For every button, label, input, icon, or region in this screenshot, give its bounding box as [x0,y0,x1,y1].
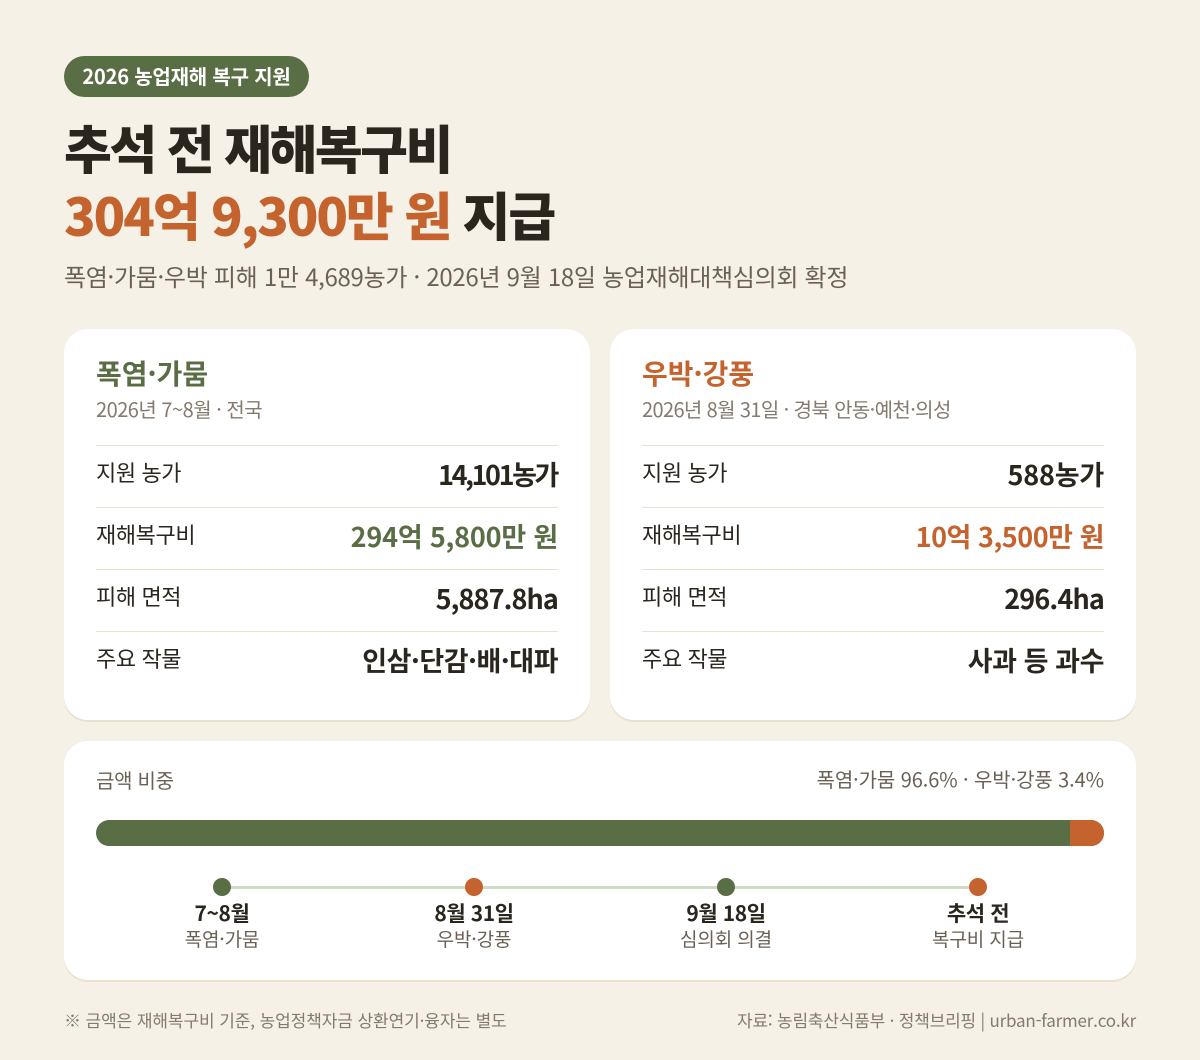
timeline line [222,886,978,889]
row value: 294억 5,800만 원 [351,516,558,555]
panel subheading: 2026년 7~8월 · 전국 [96,394,262,423]
panel: amount share and timeline [64,741,1136,980]
row value: 사과 등 과수 [968,640,1104,679]
title [64,109,554,251]
row value: 14,101농가 [438,454,557,493]
row label: 주요 작물 [642,642,727,674]
badge: 2026 농업재해 복구 지원 [82,61,291,90]
share values: 폭염·가뭄 96.6% · 우박·강풍 3.4% [817,764,1104,793]
row value: 588농가 [1008,454,1104,493]
row label: 피해 면적 [96,580,181,612]
timeline dot [969,878,987,896]
timeline item: 9월 18일 [686,898,766,928]
row label: 지원 농가 [642,456,727,488]
share label: 금액 비중 [96,765,174,794]
row value: 인삼·단감·배·대파 [362,640,558,679]
row label: 피해 면적 [642,580,727,612]
panel heading: 폭염·가뭄 [96,353,208,393]
row value: 5,887.8ha [436,578,558,617]
timeline item: 복구비 지급 [932,925,1024,952]
timeline item: 심의회 의결 [680,925,772,952]
timeline item [932,898,1024,952]
timeline dot [465,878,483,896]
timeline item: 7~8월 [195,898,249,928]
source: 자료: 농림축산식품부 · 정책브리핑 | urban-farmer.co.kr [737,1007,1136,1032]
timeline item: 우박·강풍 [437,925,511,952]
row value: 10억 3,500만 원 [916,516,1104,555]
timeline dot [213,878,231,896]
panel: heat and drought [64,329,590,720]
timeline item [185,898,259,952]
row label: 주요 작물 [96,642,181,674]
row label: 지원 농가 [96,456,181,488]
timeline item [680,898,772,952]
stacked share bar [96,820,1104,846]
timeline dot [717,878,735,896]
timeline item: 폭염·가뭄 [185,925,259,952]
panel: hail and gale [610,329,1136,720]
badge [64,56,309,97]
timeline item [434,898,514,952]
row value: 296.4ha [1004,578,1104,617]
subtitle: 폭염·가뭄·우박 피해 1만 4,689농가 · 2026년 9월 18일 농업재해대책심의회 확정 [64,258,848,293]
title: 추석 전 재해복구비 [64,109,451,184]
row label: 재해복구비 [642,518,741,550]
timeline item: 8월 31일 [434,898,514,928]
footnote: ※ 금액은 재해복구비 기준, 농업정책자금 상환연기·융자는 별도 [64,1007,507,1032]
title: 304억 9,300만 원 지급 [64,176,554,251]
timeline item: 추석 전 [947,898,1009,928]
panel subheading: 2026년 8월 31일 · 경북 안동·예천·의성 [642,394,951,423]
panel heading: 우박·강풍 [642,353,754,393]
row label: 재해복구비 [96,518,195,550]
